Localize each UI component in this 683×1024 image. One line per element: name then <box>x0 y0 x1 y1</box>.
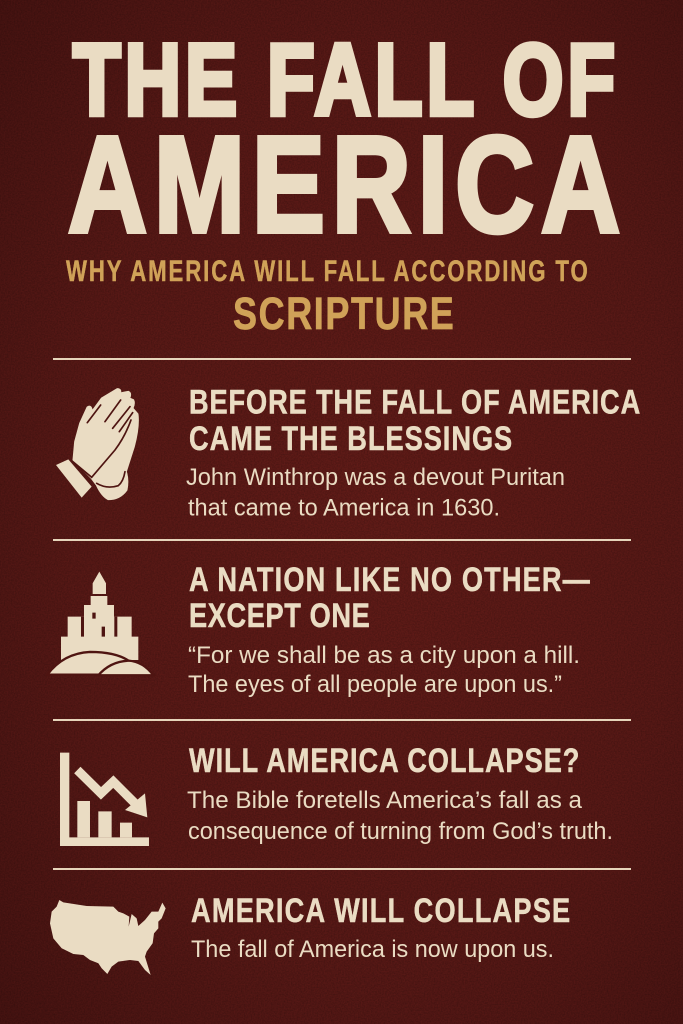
icon: city on a hill <box>47 572 153 675</box>
body text: The fall of America is now upon us. <box>191 936 554 963</box>
panel: collapse question <box>60 741 613 846</box>
body text: “For we shall be as a city upon a hill. <box>188 642 580 669</box>
heading: AMERICA WILL COLLAPSE <box>191 891 570 930</box>
title: THE FALL OF <box>73 24 615 137</box>
title: AMERICA <box>68 109 620 261</box>
icon: praying hands <box>56 389 138 499</box>
subtitle: SCRIPTURE <box>233 288 454 339</box>
icon: falling bar chart <box>60 753 149 846</box>
panel: nation <box>47 560 590 698</box>
heading: BEFORE THE FALL OF AMERICA <box>189 383 640 421</box>
heading: A NATION LIKE NO OTHER— <box>189 560 590 599</box>
panel: collapse <box>50 891 570 975</box>
icon: map of the United States <box>50 900 166 975</box>
body text: The Bible foretells America’s fall as a <box>187 787 583 814</box>
body text line 2: The eyes of all people are upon us.” <box>188 671 562 698</box>
body text line 2: that came to America in 1630. <box>188 494 500 522</box>
title <box>68 24 620 261</box>
heading line 2: CAME THE BLESSINGS <box>189 419 512 458</box>
body text: John Winthrop was a devout Puritan <box>186 464 565 491</box>
subtitle: WHY AMERICA WILL FALL ACCORDING TO <box>66 254 588 288</box>
panel: blessings <box>56 383 640 522</box>
heading line 2: EXCEPT ONE <box>189 596 370 635</box>
heading: WILL AMERICA COLLAPSE? <box>189 741 579 780</box>
subtitle <box>66 254 588 339</box>
body text line 2: consequence of turning from God’s truth. <box>188 818 613 845</box>
